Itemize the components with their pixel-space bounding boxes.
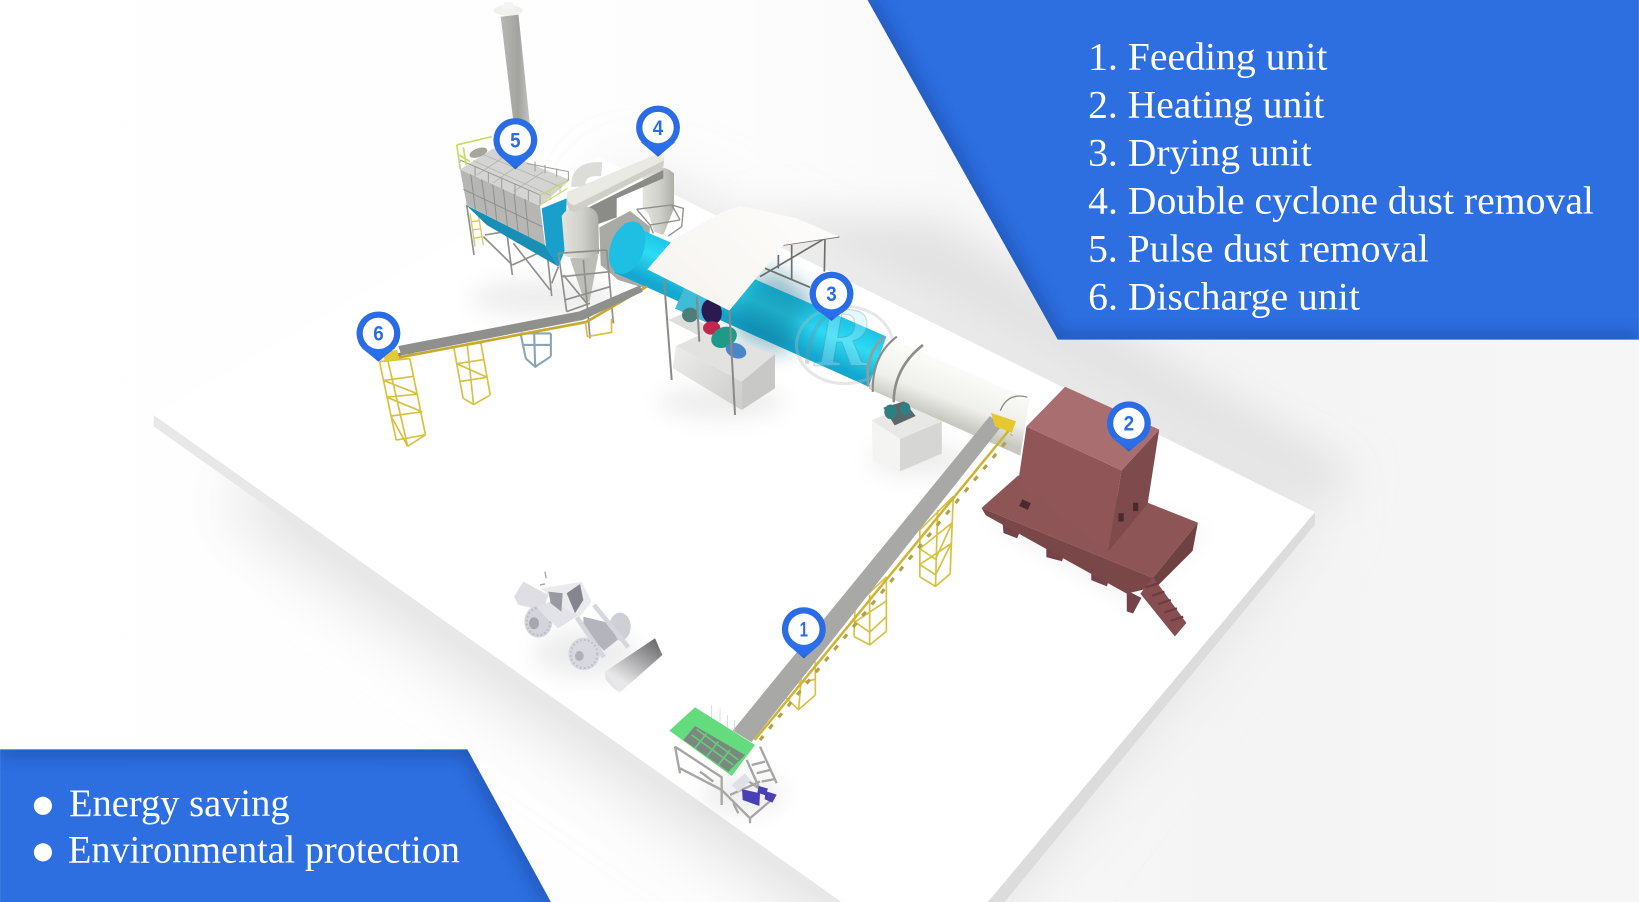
list text: 3. Drying unit xyxy=(1088,130,1312,174)
base top face xyxy=(676,332,775,382)
marker 2: 2 xyxy=(1124,413,1134,436)
truss xyxy=(388,286,647,360)
conveyor belt xyxy=(733,416,1001,742)
concrete base and drive, roof xyxy=(647,206,839,415)
top-right panel: unit list xyxy=(868,0,1639,340)
list text: 1. Feeding unit xyxy=(1088,34,1328,78)
conveyor truss xyxy=(755,431,1009,740)
blue hopper xyxy=(466,205,558,267)
equipment ground shadows xyxy=(470,279,1202,813)
bullet: environmental protection xyxy=(34,843,52,861)
white unit xyxy=(732,773,751,792)
concrete pier and rollers xyxy=(872,401,942,471)
list text: 4. Double cyclone dust removal xyxy=(1088,178,1594,222)
feeding hopper xyxy=(669,705,777,823)
watermark: R xyxy=(813,290,871,385)
text: environmental protection: Environmental protection xyxy=(68,828,460,872)
heating furnace (unit 2) xyxy=(982,387,1198,637)
duct elbow xyxy=(578,169,602,187)
marker 6: 6 xyxy=(373,323,384,346)
hood behind the drum xyxy=(599,211,650,288)
front cyclone stand xyxy=(558,250,613,338)
marker 3: 3 xyxy=(826,283,837,306)
platform top surface xyxy=(154,157,1315,902)
rear right wheel xyxy=(609,613,631,641)
head pulley xyxy=(383,350,399,362)
cab frame xyxy=(542,582,592,617)
rear cyclone xyxy=(643,167,674,235)
front cyclone body xyxy=(562,206,599,258)
top face with grid xyxy=(460,148,570,206)
collector legs xyxy=(467,205,558,296)
railings xyxy=(460,160,568,206)
base left face xyxy=(673,346,742,410)
blue-grey tower xyxy=(521,333,551,367)
panel background xyxy=(868,0,1639,340)
marker 5 xyxy=(493,118,537,169)
bucket xyxy=(605,638,662,692)
marker 3 xyxy=(810,272,853,321)
purple motors xyxy=(742,789,760,806)
conveyor head xyxy=(991,413,1016,433)
rear cyclone stand xyxy=(637,205,683,236)
watermark xyxy=(797,290,893,385)
drive gear and motors xyxy=(675,281,749,361)
marker 1: 1 xyxy=(800,619,808,642)
platform side edge left xyxy=(154,415,841,902)
conveyor towers xyxy=(783,496,953,710)
marker 2 xyxy=(1107,401,1151,452)
bullet: energy saving xyxy=(34,797,52,815)
base right face xyxy=(742,354,775,410)
marker 5: 5 xyxy=(510,129,521,152)
platform shadow xyxy=(220,178,1319,902)
rear body xyxy=(514,582,548,608)
cab windows xyxy=(567,584,583,613)
furnace base top xyxy=(982,476,1198,578)
list text: 6. Discharge unit xyxy=(1088,274,1360,318)
rear left wheel xyxy=(524,606,552,638)
furnace legs xyxy=(1002,521,1021,538)
list text: 5. Pulse dust removal xyxy=(1088,226,1429,270)
marker 6 xyxy=(356,311,400,362)
marker 1 xyxy=(782,607,826,658)
yellow access ladder xyxy=(470,213,483,247)
roof rear truss xyxy=(760,237,839,287)
rotary drum, white section xyxy=(868,337,1030,456)
green bin xyxy=(669,707,755,776)
wheel loader xyxy=(514,572,662,692)
furnace body xyxy=(1018,426,1122,552)
platform side edge right xyxy=(988,512,1315,902)
list text xyxy=(1088,34,1594,318)
feeding conveyor (unit 1) xyxy=(733,396,1027,742)
chimney xyxy=(493,2,530,130)
engine centre xyxy=(583,617,617,651)
hopper frame xyxy=(675,747,777,823)
front wheel xyxy=(568,638,600,670)
lift arms xyxy=(577,605,628,657)
upper plate xyxy=(668,313,730,344)
collector tank xyxy=(468,145,489,160)
marker 4 xyxy=(636,106,680,157)
duct slab lower face xyxy=(567,154,664,212)
duct underside xyxy=(583,170,663,224)
support towers xyxy=(379,343,490,446)
bottom-left panel: benefits xyxy=(0,749,551,902)
belt xyxy=(398,285,643,355)
mid body xyxy=(537,598,582,628)
roof shadow on the drum xyxy=(732,267,815,355)
list text: 2. Heating unit xyxy=(1088,82,1324,126)
pulse dust collector xyxy=(457,137,570,296)
grey front face xyxy=(460,169,545,245)
roof xyxy=(647,206,839,311)
furnace stairs xyxy=(1140,577,1186,637)
back edge shadow band xyxy=(753,214,1359,502)
panel background xyxy=(0,749,551,902)
duct slab top face xyxy=(567,154,664,205)
cyclones and duct xyxy=(558,154,683,338)
roof posts xyxy=(664,280,735,415)
discharge conveyor (unit 6) xyxy=(379,285,647,446)
furnace base sides xyxy=(982,508,1153,594)
green railing xyxy=(457,137,492,167)
hopper rods xyxy=(712,705,734,733)
text: energy saving: Energy saving xyxy=(69,781,290,825)
front cyclone cone xyxy=(570,255,598,303)
furnace ports xyxy=(1019,499,1031,510)
marker 4: 4 xyxy=(653,117,664,140)
rotary drum, blue section xyxy=(602,216,893,387)
